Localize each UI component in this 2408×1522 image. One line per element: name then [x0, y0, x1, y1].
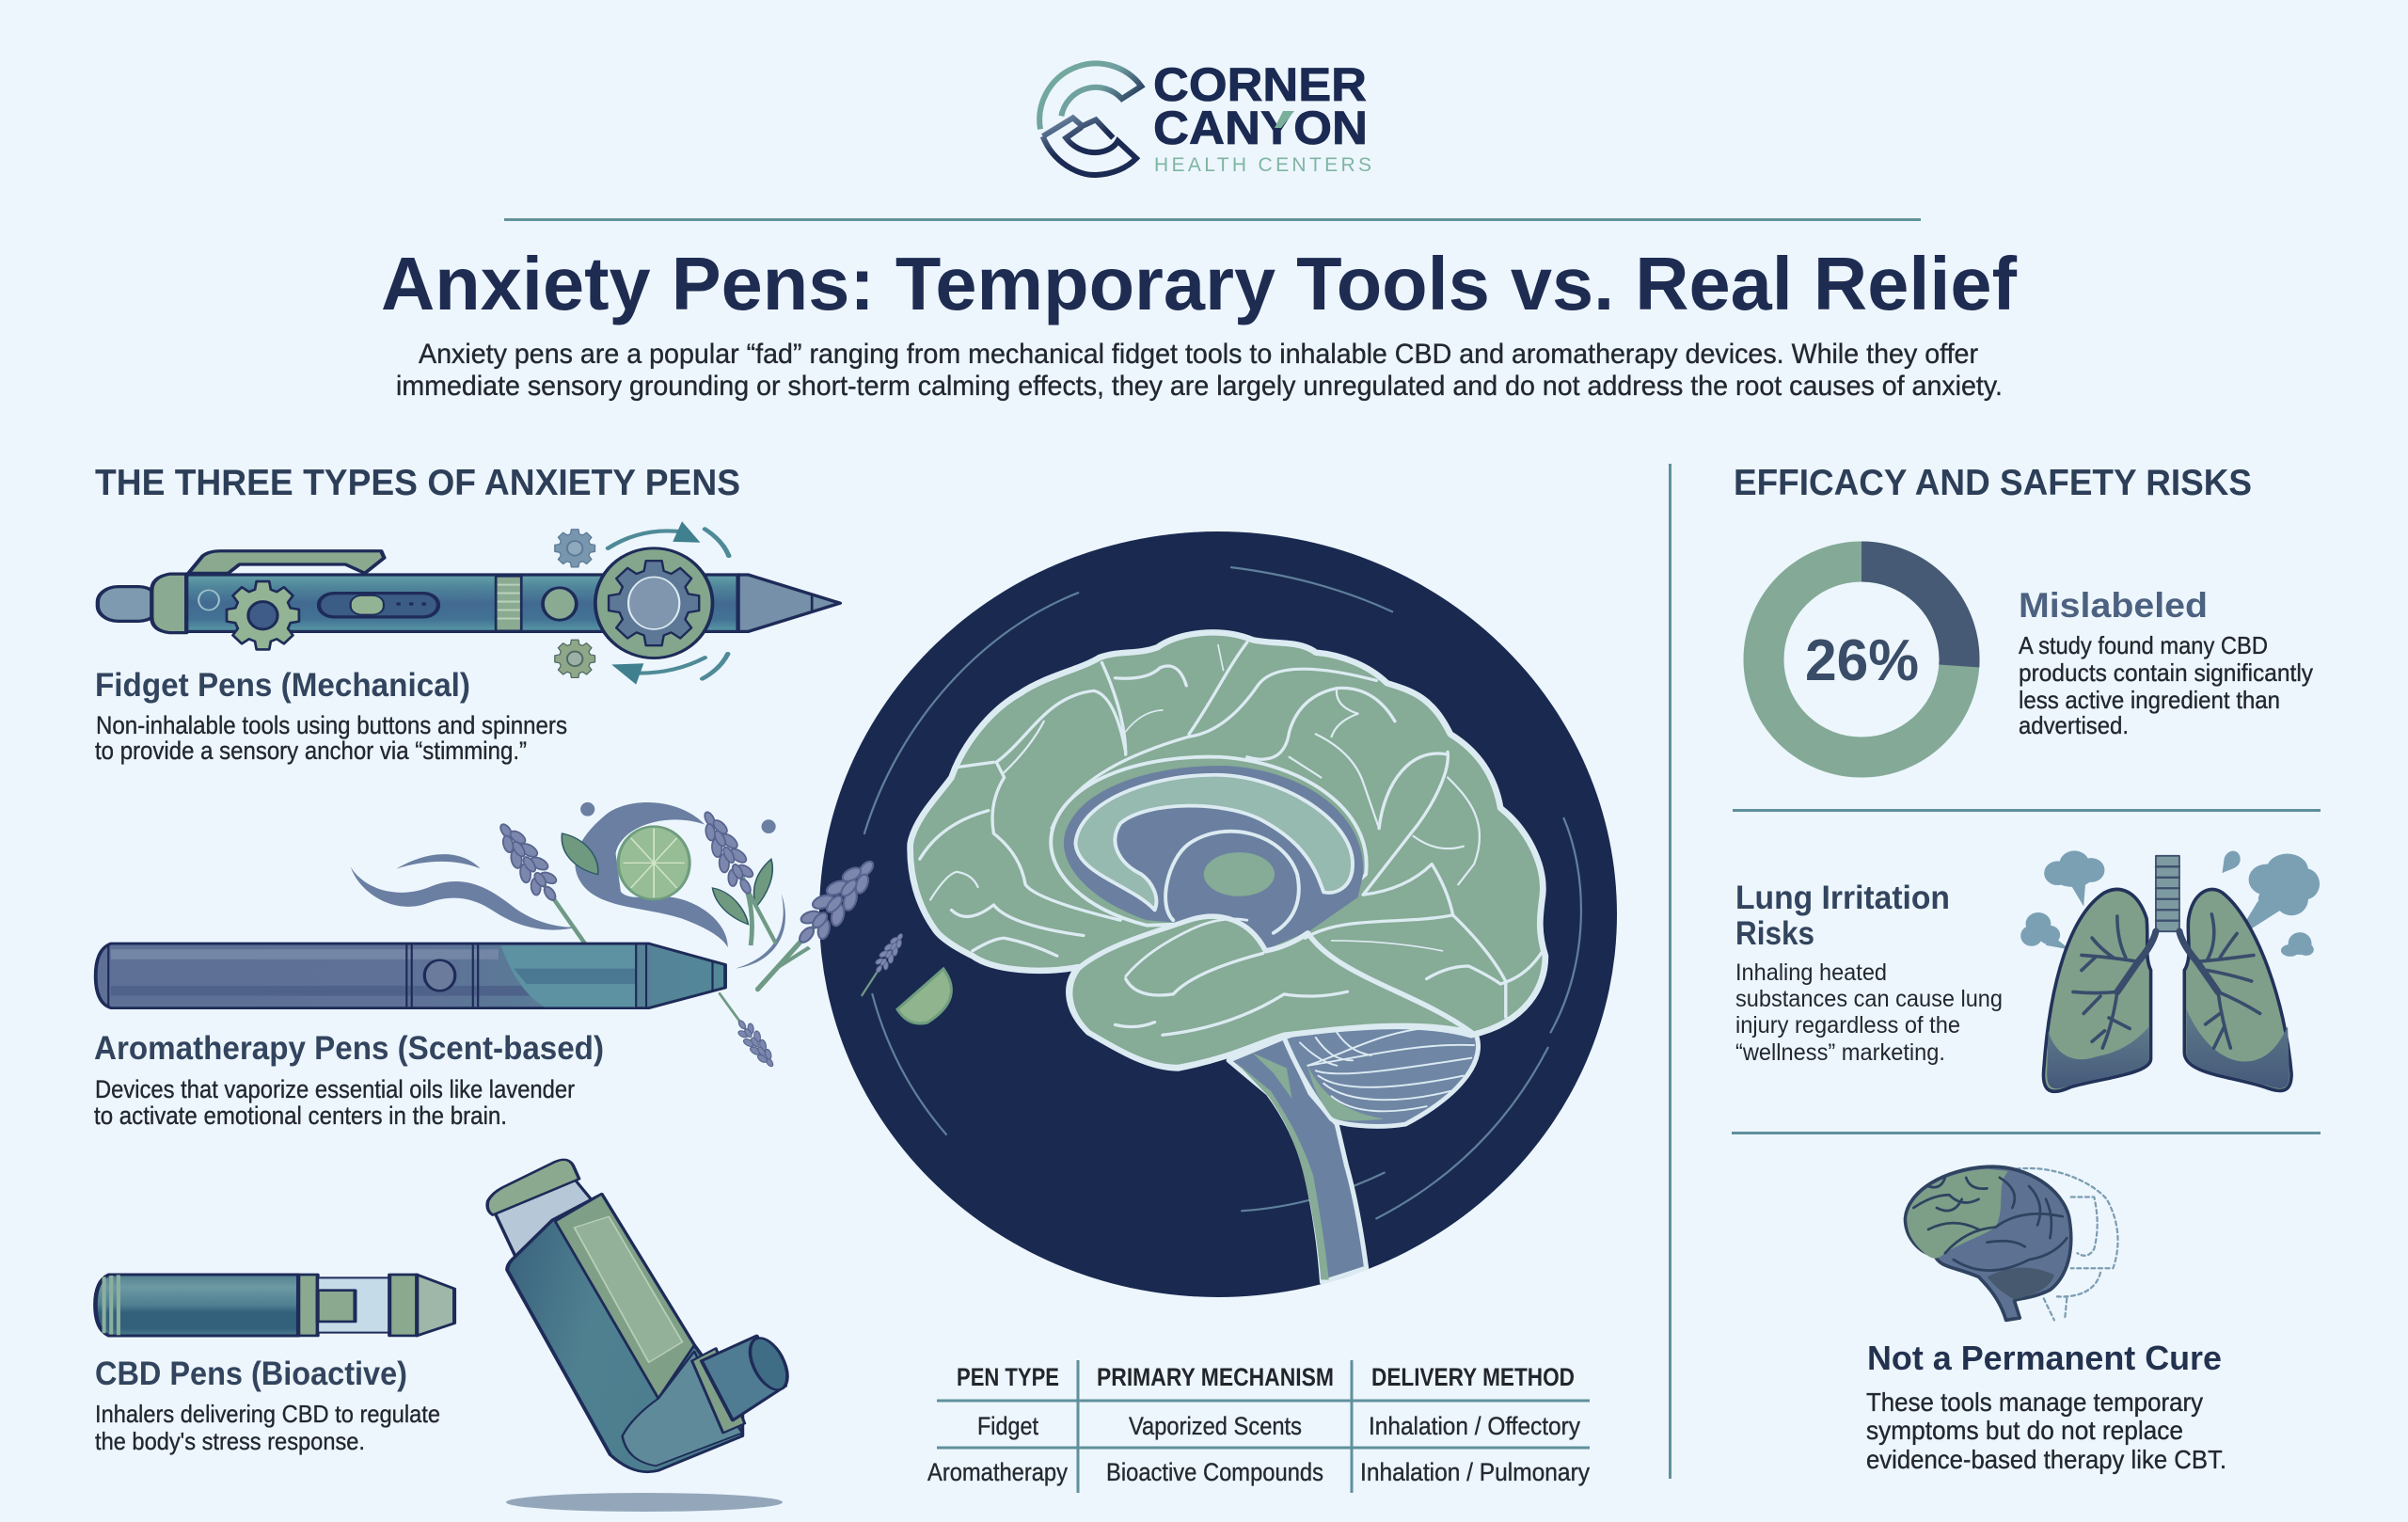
brainstem — [1228, 1038, 1367, 1282]
aromatherapy pen text — [94, 1030, 604, 1130]
aromatherapy pen text: to activate emotional centers in the brain. — [94, 1102, 507, 1130]
not a permanent cure text: symptoms but do not replace — [1866, 1416, 2183, 1445]
table rows: Inhalation / Offectory — [1369, 1412, 1580, 1440]
canister — [495, 1179, 591, 1258]
table rows: Vaporized Scents — [1129, 1412, 1302, 1440]
cerebellum — [1987, 1268, 2054, 1299]
lung irritation text: injury regardless of the — [1735, 1012, 1960, 1038]
donut chart: 26% mislabeled — [1764, 562, 1959, 757]
slider — [319, 594, 438, 617]
lime wedge — [897, 969, 951, 1023]
fidget pen text — [95, 667, 567, 765]
heading: the three types: THE THREE TYPES OF ANXIETY PENS — [95, 463, 740, 503]
lime slice — [618, 827, 689, 899]
intro paragraph: Anxiety pens are a popular “fad” ranging from mechanical fidget tools to inhalable CBD and aromatherapy devices. While they offer — [419, 339, 1978, 370]
mini brain illustration — [1905, 1166, 2118, 1320]
mislabeled text: advertised. — [2019, 711, 2129, 739]
not a permanent cure text: These tools manage temporary — [1866, 1387, 2203, 1417]
cerebellum — [1284, 1023, 1479, 1126]
logo wordmark: CANYON — [1153, 102, 1368, 154]
pen clip — [188, 551, 384, 573]
mislabeled text: Mislabeled — [2019, 586, 2208, 625]
intro paragraph: immediate sensory grounding or short-term calming effects, they are largely unregulated and do not address the root causes of anxiety. — [396, 371, 2003, 402]
mislabeled text: less active ingredient than — [2019, 686, 2280, 714]
inhaler illustration — [487, 1160, 795, 1472]
inhaler body — [507, 1194, 742, 1472]
lung irritation text: Lung Irritation — [1735, 880, 1950, 916]
small gears — [555, 530, 595, 567]
lung irritation text: “wellness” marketing. — [1735, 1039, 1945, 1066]
aroma illustration: scent swirl, lime and lavender — [351, 802, 951, 1072]
fidget pen text: to provide a sensory anchor via “stimming.” — [95, 737, 527, 765]
left gear — [227, 581, 299, 649]
CBD pen text — [95, 1356, 440, 1455]
dark circle — [819, 531, 1617, 1297]
logo wordmark: CORNER — [1153, 58, 1367, 111]
trachea — [2156, 856, 2179, 931]
fidget pen illustration — [98, 521, 840, 685]
mislabeled text — [2019, 586, 2313, 739]
grip — [496, 577, 521, 631]
lungs illustration — [2020, 850, 2320, 1091]
pen tip — [738, 575, 840, 631]
limbic arches — [1051, 757, 1367, 926]
lung irritation text: substances can cause lung — [1735, 986, 2003, 1012]
wrinkles — [1913, 1178, 2067, 1271]
CBD pen illustration — [95, 1275, 454, 1336]
bronchi — [2073, 914, 2260, 1048]
dashed ghost outline — [2017, 1168, 2118, 1320]
intro paragraph — [396, 339, 2003, 402]
table rows: Inhalation / Pulmonary — [1360, 1458, 1590, 1486]
logo: Corner Canyon Health Centers — [1039, 58, 1371, 176]
logo wordmark: HEALTH CENTERS — [1154, 154, 1371, 176]
data table — [927, 1360, 1590, 1493]
mouthpiece — [692, 1348, 745, 1433]
table rows — [927, 1412, 1590, 1486]
mislabeled text: A study found many CBD — [2019, 631, 2268, 659]
table rows: Bioactive Compounds — [1106, 1458, 1323, 1486]
not a permanent cure text: Not a Permanent Cure — [1867, 1339, 2222, 1377]
mislabeled text: products contain significantly — [2019, 658, 2313, 687]
inhaler shadow — [506, 1493, 783, 1512]
sulci — [920, 642, 1543, 1035]
smoke clouds — [2020, 850, 2320, 957]
donut value: 26% — [1805, 628, 1919, 693]
green frontal lobe — [1907, 1169, 2008, 1259]
CBD pen text: the body's stress response. — [95, 1427, 365, 1455]
aromatherapy pen illustration — [96, 943, 725, 1008]
logo wordmark — [1153, 58, 1371, 176]
temporal lobe — [1070, 916, 1471, 1067]
spinner wheel — [595, 548, 713, 658]
table rows: Aromatherapy — [927, 1458, 1068, 1486]
lavender sprigs — [487, 815, 600, 955]
heading: efficacy and safety risks: EFFICACY AND SAFETY RISKS — [1734, 463, 2252, 503]
logo icon — [1039, 63, 1141, 175]
table header: DELIVERY METHOD — [1371, 1363, 1575, 1391]
not a permanent cure text — [1866, 1339, 2226, 1474]
pen button — [424, 960, 455, 991]
pen end stem — [98, 587, 159, 621]
aromatherapy pen text: Aromatherapy Pens (Scent-based) — [94, 1030, 604, 1067]
brain body — [1905, 1166, 2071, 1320]
pen cap — [151, 574, 186, 633]
right lung — [2184, 889, 2291, 1091]
table rows: Fidget — [977, 1412, 1038, 1440]
table header: PEN TYPE — [957, 1363, 1059, 1391]
title: Anxiety Pens: Temporary Tools vs. Real Relief — [381, 242, 2017, 325]
CBD pen text: CBD Pens (Bioactive) — [95, 1356, 407, 1392]
central brain circle — [819, 531, 1617, 1297]
leaves — [562, 833, 598, 875]
fidget pen text: Fidget Pens (Mechanical) — [95, 667, 470, 704]
thalamus oval — [1204, 852, 1275, 896]
pen body — [186, 575, 739, 631]
table header: PRIMARY MECHANISM — [1097, 1363, 1334, 1391]
lung irritation text: Risks — [1735, 915, 1814, 952]
lung irritation text: Inhaling heated — [1735, 959, 1887, 986]
cerebrum — [911, 632, 1545, 1068]
button — [543, 588, 577, 620]
lung irritation text — [1735, 880, 2003, 1066]
brain illustration — [864, 567, 1581, 1282]
aromatherapy pen text: Devices that vaporize essential oils like lavender — [95, 1075, 575, 1103]
pen body — [96, 943, 725, 1008]
not a permanent cure text: evidence-based therapy like CBT. — [1866, 1445, 2226, 1474]
rotation arrows — [608, 529, 729, 679]
left lung — [2043, 889, 2151, 1091]
CBD pen text: Inhalers delivering CBD to regulate — [95, 1400, 440, 1428]
table header — [957, 1363, 1575, 1391]
fidget pen text: Non-inhalable tools using buttons and spinners — [96, 711, 567, 739]
